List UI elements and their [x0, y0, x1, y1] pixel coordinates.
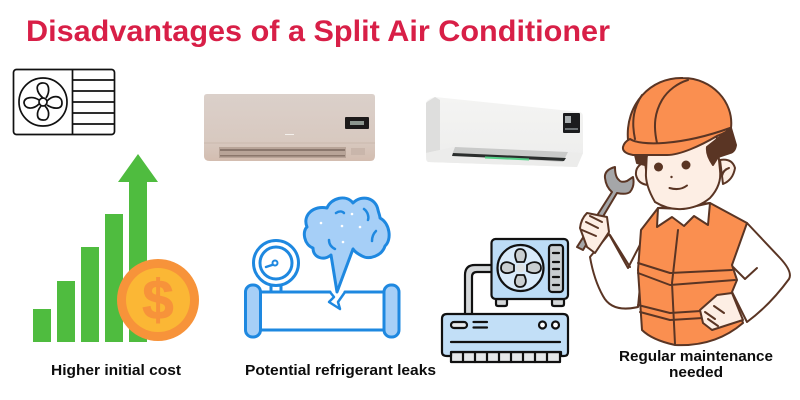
pressure gauge	[254, 240, 298, 292]
icon: dollar coin	[117, 259, 199, 341]
label: maintenance: needed	[669, 364, 723, 381]
shirt collar	[657, 203, 710, 227]
outdoor unit	[492, 239, 568, 299]
icon: blue air conditioner system	[442, 239, 568, 362]
label: leaks: Potential refrigerant leaks	[245, 362, 436, 379]
icon: outdoor unit outline	[14, 70, 114, 134]
indoor unit: white	[426, 97, 583, 167]
connecting pipe	[465, 265, 492, 315]
label: cost: Higher initial cost	[51, 362, 181, 379]
ears	[636, 160, 735, 185]
bar chart with rising arrow	[33, 154, 158, 342]
wrench	[577, 167, 634, 250]
left arm	[590, 234, 645, 309]
label: maintenance	[619, 348, 773, 381]
right arm	[728, 223, 790, 322]
safety vest	[638, 203, 747, 345]
indoor unit: beige	[204, 94, 375, 161]
hard hat	[628, 78, 731, 144]
pipe body with crack	[261, 292, 384, 330]
unit feet	[496, 299, 564, 306]
face details	[654, 160, 690, 189]
illustration: maintenance worker	[577, 78, 790, 345]
right hand	[700, 293, 743, 330]
title: Disadvantages of a Split Air Conditioner	[26, 15, 610, 48]
hair	[635, 128, 736, 165]
vent strip	[451, 352, 560, 362]
head	[646, 130, 720, 209]
left hand	[580, 213, 609, 253]
pipe flanges	[246, 285, 260, 337]
indoor unit	[442, 314, 568, 356]
icon: leaking pipe	[246, 198, 399, 337]
icon: dollar coin: $	[142, 268, 174, 331]
refrigerant cloud	[304, 198, 389, 292]
label: maintenance: Regular maintenance	[619, 348, 773, 365]
